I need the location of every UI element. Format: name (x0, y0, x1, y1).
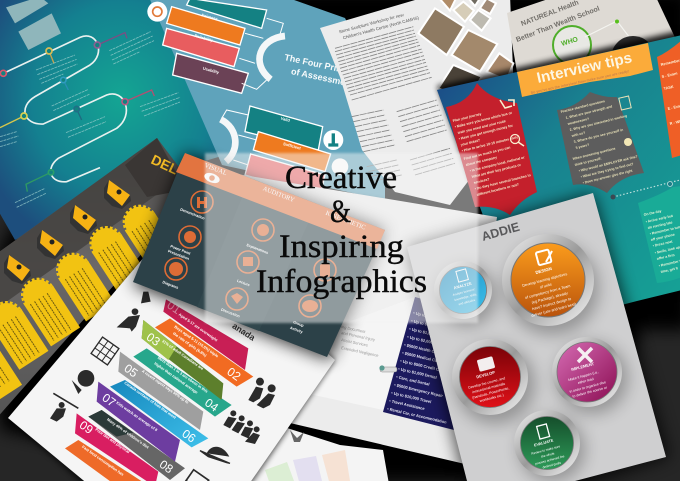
navy list: • $5000 Emergency Repair (394, 382, 444, 398)
title: & (330, 194, 351, 230)
card: practice questions (557, 92, 644, 193)
navy list: • $5000 Health Care (404, 342, 442, 355)
icons (147, 2, 348, 175)
title block (125, 138, 185, 197)
band captions: Boys aged 5-11 (10.5%) triple (173, 325, 219, 358)
band numbers: 09 (77, 418, 96, 437)
card: on the day: On the day (643, 209, 662, 217)
card: plan your journey: Find out as much as you can (463, 145, 511, 161)
band captions: Many 40% of children's diet (106, 418, 150, 450)
wings mark (290, 430, 304, 442)
card: plan your journey: about the company (465, 155, 497, 167)
card: practice questions: • What are they trying to find out? (580, 162, 634, 179)
orange header: VISUAL (203, 162, 228, 177)
document title: Stone Sculpture Workshop for new (338, 12, 405, 34)
navy list: • Up to $1,000 (409, 326, 436, 337)
circle: evaluate: desired goals (542, 461, 562, 469)
circle: implement: either lead (577, 377, 594, 385)
bars: lower group (245, 106, 331, 197)
people icons (50, 292, 276, 481)
bar labels: Sufficient (283, 141, 302, 151)
circle: analyze (434, 261, 492, 319)
navy list: • Up to $500 (411, 318, 435, 328)
card: plan your journey: your ticket? (460, 138, 480, 147)
card: on the day (638, 186, 680, 283)
heading fragment: anada (231, 321, 257, 343)
panel: interview tips (437, 30, 680, 332)
card: practice questions: 1. What are your strength and (565, 105, 613, 120)
panel: learning styles (visual, auditory, kinesthetic) (133, 153, 385, 360)
band 10 (65, 440, 150, 481)
card: plan your journey: • Have you got enough money for (458, 123, 514, 141)
icon: ball face (72, 370, 94, 394)
photo grid (418, 0, 513, 100)
circle: analyze: and attitudes (458, 298, 476, 306)
card: on the day: time, get it (660, 266, 679, 274)
banner (517, 43, 653, 97)
band 09 (75, 413, 158, 481)
column labels: Group (292, 320, 305, 328)
column labels: Lecture (236, 279, 250, 287)
fold handle (379, 365, 397, 372)
navy list: • Up to (413, 310, 427, 318)
band captions: More than 1 in 3 are obese in this (157, 356, 209, 394)
panel: brochure with navy list (225, 172, 497, 468)
card: practice questions: with us? (570, 131, 586, 138)
card: orange tips: Remember (660, 59, 680, 67)
circle: develop: Develop the course, and (468, 376, 506, 390)
circle: evaluate (514, 410, 580, 476)
icon: crowd (223, 410, 260, 444)
card: practice questions: 2. Why are you interested in working (569, 114, 627, 132)
band captions: Fast food consumption has (81, 445, 124, 477)
circle: develop: instructional materials (472, 382, 506, 394)
band 05 (118, 352, 203, 430)
card: plan your journey: Plan your journey (452, 112, 482, 123)
card: practice questions: • Does my answer give the right (582, 169, 634, 185)
circle: design: (eg Package), already (531, 291, 568, 305)
orange header: KINESTHETIC (325, 210, 367, 231)
panel: natureal health poster (507, 0, 680, 90)
circle: evaluate: EVALUATE (534, 438, 554, 448)
banner: So you've got the interview! Now make sure you are ready! (530, 69, 629, 95)
navy list: • Up to $2,000 (407, 334, 434, 345)
card: practice questions: weaknesses? (566, 117, 589, 126)
circle: design: deliver (use and learn best) (531, 302, 577, 318)
card: on the day: do running late (647, 220, 673, 230)
column labels: Activity (289, 326, 304, 335)
feature list: ing Document (341, 324, 367, 334)
card: on the day: offer a firm (656, 253, 675, 261)
title: of Assessment (290, 66, 355, 89)
circle: analyze: Analyze learners' (452, 287, 476, 297)
panel: teal roadmap (0, 0, 225, 240)
feature list (341, 324, 380, 358)
timeline path (3, 36, 126, 182)
solid icon glyphs (169, 197, 330, 312)
card: practice questions: think to yourself: (574, 156, 602, 167)
circle: implement: to deliver the course or (572, 385, 608, 399)
circle: develop: workbooks etc.) (479, 393, 504, 403)
band 01 (163, 299, 248, 370)
circle: develop (452, 339, 528, 415)
hex icons (4, 180, 131, 284)
icon: couple (248, 378, 276, 408)
bar labels (194, 12, 302, 151)
band numbers: 04 (202, 395, 221, 415)
card: practice questions: Practice standard questions (560, 99, 605, 114)
circle: evaluate: the whole (541, 451, 555, 459)
feature list: Assist Services (341, 337, 368, 348)
card: on the day: • Smile, look up (654, 245, 680, 255)
orange header (176, 153, 385, 249)
card: practice questions: 5 years? (575, 143, 590, 150)
feature list: and Personal Injury (341, 330, 376, 342)
navy list: • Rental Car, or Accommodation (387, 406, 448, 425)
circle: design (502, 234, 594, 326)
band captions: Kids watch an average of 8 (115, 401, 159, 433)
circle: implement (552, 337, 622, 407)
poster title: Better Than Wealth School (515, 5, 601, 44)
panel: yellow badges (0, 138, 200, 420)
band 04 (133, 348, 232, 417)
card: plan your journey: different locations or not? (476, 183, 519, 197)
circle: design: have? Instruct design to (532, 297, 572, 311)
circle: design: Develop learning objectives (522, 272, 568, 288)
bar labels: Usability (202, 66, 220, 75)
circle: develop: (handouts, PowerPoints, (472, 386, 510, 400)
panel: workshop document (320, 0, 515, 205)
feature list: Extended Negligence (341, 345, 380, 358)
circle: evaluate: process achieved the (535, 454, 565, 466)
panel: mini document cards (245, 428, 390, 481)
panel: addie (407, 193, 670, 481)
circle: develop: DEVELOP (476, 370, 496, 379)
circle: evaluate: Review to make sure (531, 444, 561, 456)
band numbers: 03 (144, 330, 163, 349)
band numbers: 07 (99, 390, 119, 410)
band numbers (77, 298, 244, 476)
icon: weightlifter (50, 393, 78, 422)
bars: top group (163, 0, 267, 93)
navy list (383, 297, 470, 432)
column labels: Diagrams (162, 280, 179, 290)
column labels: Discussion (220, 308, 241, 319)
timeline nodes (0, 42, 128, 175)
circle: analyze: ANALYZE (453, 281, 473, 290)
column icons (165, 191, 336, 317)
icon: calendar (91, 337, 119, 365)
column labels: Power Point (170, 244, 192, 256)
circle: design: DESIGN (535, 266, 552, 275)
circle: design: of competency from a Team (525, 284, 571, 300)
orange header: AUDITORY (262, 185, 296, 204)
who badge: WHO (561, 36, 579, 48)
panel: four principles of assessment (147, 0, 385, 200)
band captions: Canada contains of kids that meet (123, 381, 177, 420)
circle: implement: Make it happen (i.e., (568, 370, 600, 382)
navy list: • Up to $10,000 Travel (391, 390, 432, 404)
bar labels: Valid (280, 116, 291, 123)
yellow burst cards (0, 200, 182, 404)
timeline text blocks (0, 32, 180, 207)
who badge (553, 26, 591, 64)
column labels: Presentation (167, 249, 190, 261)
card: plan your journey: • Plan to arrive 10-15 minutes early (461, 135, 518, 153)
card: practice questions: • Why would an EMPLOYER ask this? (578, 154, 638, 173)
card: plan your journey: What are their key products or (471, 163, 522, 179)
card: plan your journey: • Make sure you know which bus or (454, 111, 513, 129)
icon: cloche (200, 447, 230, 463)
band numbers: 06 (179, 426, 199, 446)
card: orange tips (657, 40, 680, 158)
band captions: 31% of adult Canadians are (161, 339, 204, 371)
icon: tv (186, 470, 209, 481)
circle: implement: IMPLEMENT (571, 361, 595, 372)
band numbers: 08 (157, 457, 176, 476)
bracket arcs (260, 36, 285, 79)
band captions: A recent report says 50% up to (141, 369, 190, 405)
eye icon (203, 171, 221, 185)
document title: Children's Health Centre (North CAMHS) (342, 15, 420, 40)
connector and dot (585, 20, 630, 38)
soft shadows (437, 241, 628, 481)
circle: analyze: knowledge, skills, (454, 292, 478, 302)
title: Creative (285, 160, 397, 196)
column labels: Demonstration (179, 208, 206, 221)
circle: implement: in order to organize else (569, 380, 606, 394)
title block: DEL (149, 151, 181, 178)
dark circle (611, 36, 655, 80)
circle: design: of units (539, 282, 552, 290)
band captions: the rate of girls (6.8%) (172, 332, 208, 358)
band 06 (110, 380, 208, 447)
title: Infographics (256, 264, 427, 300)
connectors (0, 33, 154, 192)
translucent overlay (205, 153, 478, 323)
band 02 (155, 318, 253, 387)
addie title: ADDIE (480, 220, 521, 244)
card: plan your journey: • Is the company local, national or (469, 155, 526, 173)
panel: health infographic (8, 225, 335, 481)
title: Inspiring (279, 229, 404, 265)
title: The Four Principles (284, 52, 368, 79)
title (256, 160, 427, 300)
card: orange tips: S - Exam (661, 71, 678, 79)
navy list: • Up to $500 Credit Card (400, 358, 446, 373)
navy list: • Care, and Dental (396, 374, 430, 387)
navy list: • $5000 Medical Care (402, 350, 442, 364)
band numbers: 01 (164, 298, 184, 317)
band captions: Aged 5-17 are overweight (178, 313, 219, 343)
band captions (81, 313, 219, 477)
card: practice questions: When answering questions (572, 146, 616, 161)
document text (335, 27, 455, 182)
navy list: • Up to $1,000 Dental (398, 366, 437, 380)
card: plan your journey: • Do they have several branches in (474, 173, 531, 191)
column labels: Explanations (246, 243, 269, 255)
dotted connector (610, 180, 680, 200)
card: on the day: • Arrive early but (645, 214, 674, 224)
card: orange tips: TASK (663, 85, 674, 91)
poster title: NATUREAL Health (520, 0, 580, 28)
card: plan your journey (446, 83, 537, 215)
band numbers: 05 (121, 361, 141, 380)
band captions: Poor diet and physical (94, 428, 130, 454)
card: plan your journey: services? (473, 177, 490, 185)
bar labels: Reliability (194, 33, 214, 43)
column labels (162, 208, 305, 335)
navy list: • Travel Assistance (389, 398, 426, 411)
card: plan your journey: train you need and your route (457, 119, 506, 135)
connector lines (222, 18, 283, 165)
bar labels: Fairness (201, 12, 219, 22)
callout boxes (6, 0, 61, 50)
card: practice questions: 3. Where do you see yourself in (573, 128, 624, 144)
pastel cards (265, 450, 350, 481)
band captions: higher than national average (153, 362, 198, 395)
band 07 (97, 382, 180, 462)
banner: Interview tips (535, 49, 634, 87)
band 08 (88, 410, 185, 480)
band 03 (142, 320, 223, 400)
band numbers: 02 (224, 364, 244, 384)
card: on the day: off your phone (650, 233, 675, 242)
card: on the day: • Dress neat (652, 239, 674, 248)
